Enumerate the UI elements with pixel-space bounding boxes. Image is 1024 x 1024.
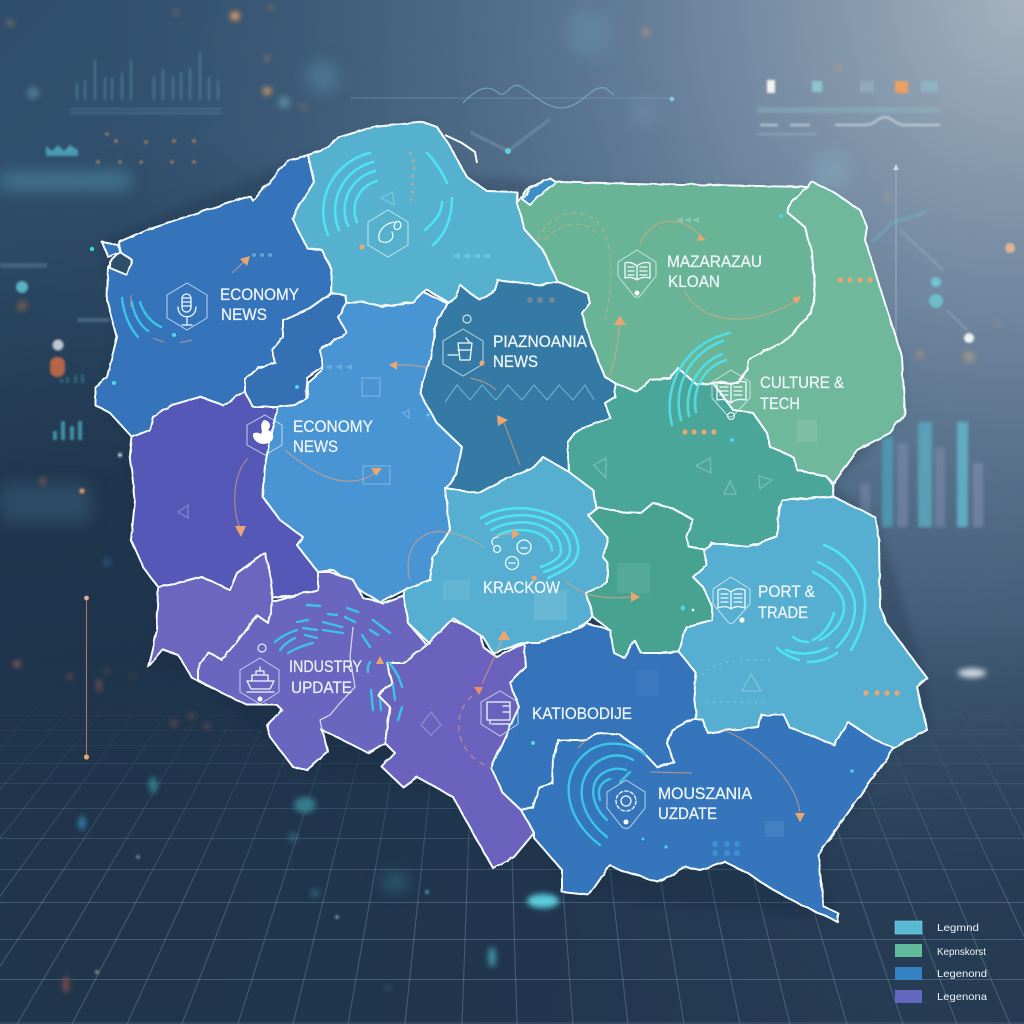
background chart: top-left bars [70, 52, 222, 113]
background dashboard: top-right [757, 80, 940, 135]
label: MAZARAZAU [667, 253, 762, 271]
label: NEWS [221, 306, 267, 324]
region: south-central purple east [378, 620, 534, 868]
label: NEWS [293, 438, 338, 456]
label: ECONOMY [220, 286, 299, 304]
west purple arrow [235, 458, 248, 528]
small green content [681, 606, 694, 611]
signal arcs [122, 298, 161, 337]
label: UZDATE [658, 805, 717, 823]
label: CULTURE & [760, 374, 844, 392]
legend [895, 921, 987, 1003]
label: MOUSZANIA [658, 785, 752, 803]
region: eastern teal [679, 497, 927, 748]
region: krakow [403, 457, 608, 653]
label: ECONOMY [293, 418, 373, 436]
region: south-east blue [521, 715, 894, 922]
hex icon: gear pin [607, 780, 645, 828]
background: left axis arrow [84, 596, 89, 760]
background chart: wave line [350, 85, 674, 154]
krakow region content [408, 508, 650, 684]
curved arrow [285, 450, 375, 481]
region: northern green [517, 178, 815, 392]
region: north-west [95, 155, 332, 437]
label: NEWS [493, 353, 538, 371]
legend item 3: Legenond [937, 968, 987, 980]
route arrows [610, 221, 703, 375]
centre blue region content [178, 361, 430, 537]
background chart: right blurred bars [860, 422, 983, 527]
dark teal region content [443, 297, 594, 465]
region: mid green [568, 368, 834, 550]
region: south-central purple [198, 572, 427, 770]
north green region content [538, 213, 873, 375]
label: PORT & [758, 583, 815, 601]
label: KRACKOW [483, 579, 560, 597]
icon: bubbles [492, 537, 531, 570]
north-west region content [112, 253, 299, 389]
region: dark teal [420, 280, 615, 493]
hex icon: figure [247, 415, 282, 455]
hex icon: cup [443, 315, 485, 376]
label: UPDATE [291, 679, 352, 697]
katowice content [481, 670, 658, 745]
hex icon: ship [240, 644, 279, 704]
signal arcs [323, 153, 377, 235]
label: TECH [760, 395, 800, 413]
south-central purple east content [421, 687, 490, 767]
legend item 2: Kepnskorst [937, 946, 986, 958]
label: INDUSTRY [289, 658, 362, 676]
signal arcs [569, 744, 645, 845]
region: small green [586, 503, 712, 658]
map regions [95, 122, 927, 922]
region: north coast [292, 122, 558, 307]
hex icon: chart swirl [368, 210, 408, 257]
signal arcs [808, 545, 865, 662]
orange arrow [232, 260, 246, 273]
background chart: left mini bars [53, 374, 84, 440]
legend item 4: Legenona [937, 991, 987, 1003]
map shadow [95, 122, 927, 922]
background: axis arrow and network right [872, 164, 1015, 343]
region: eastern green [713, 182, 905, 483]
background chart: dot grid and teal crown [46, 132, 196, 164]
hex icon: open book pin [618, 250, 656, 298]
region: katowice blue [491, 623, 696, 810]
perspective grid floor [0, 690, 1024, 1024]
hel peninsula [445, 135, 477, 163]
region: west purple [130, 392, 318, 598]
orange path [131, 295, 197, 343]
curved arrow [722, 729, 800, 812]
central green arcs and culture label [594, 333, 844, 494]
region: centre blue [263, 292, 462, 602]
inner boundary [320, 627, 355, 730]
signal arcs [275, 605, 390, 653]
label: PIAZNOANIA [493, 333, 587, 351]
region: south-west purple [148, 553, 273, 692]
eastern teal content [702, 545, 900, 702]
region: north-west lake [110, 252, 132, 275]
hex icon: microphone [167, 283, 207, 330]
south-east content [569, 729, 854, 856]
hex icon: book [712, 370, 750, 420]
zigzag wave [445, 385, 594, 402]
region: west inner [245, 293, 347, 407]
label: KLOAN [668, 273, 720, 291]
label: TRADE [758, 604, 808, 622]
region: north-west islet [102, 242, 120, 257]
south-central purple content [240, 605, 402, 730]
north coast region content [323, 152, 490, 259]
label: KATIOBODIJE [532, 705, 632, 723]
signal arcs [670, 333, 730, 425]
hex icon: book [713, 577, 750, 624]
signal arcs [481, 508, 578, 578]
hex icon: monitor [481, 691, 518, 736]
legend item 1: Legmnd [937, 922, 979, 934]
region: gdansk bay [522, 178, 556, 205]
